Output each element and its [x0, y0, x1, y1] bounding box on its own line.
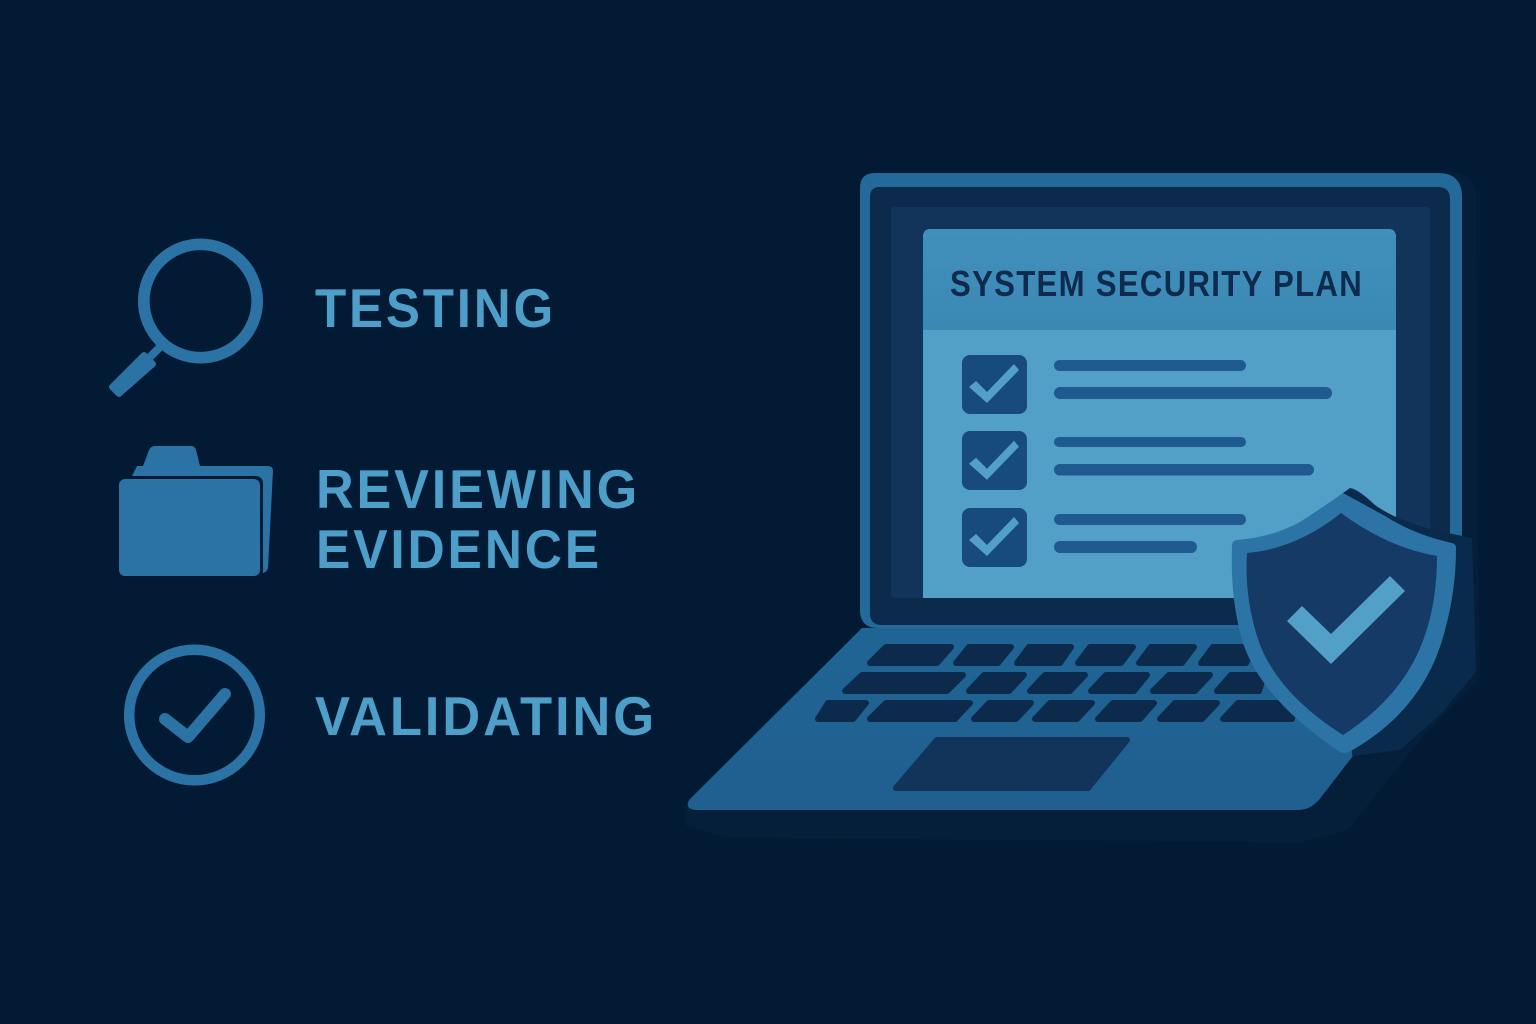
shield face: [1247, 513, 1437, 735]
laptop drop shadow: [684, 170, 1480, 842]
laptop lid: [860, 173, 1462, 628]
checklist item 2: [962, 431, 1314, 490]
document title: SYSTEM SECURITY PLAN: [950, 263, 1363, 304]
trackpad: [896, 740, 1127, 788]
laptop base: [688, 628, 1360, 810]
shield rim: [1232, 493, 1456, 753]
icon: folder: [119, 446, 273, 576]
list: activities: [112, 244, 657, 780]
document header: [923, 229, 1396, 330]
illustration: laptop with security plan: [684, 170, 1480, 842]
shield check mark: [1287, 576, 1405, 664]
checklist item 3: [962, 508, 1246, 567]
label: testing: TESTING: [315, 277, 556, 339]
label: reviewing evidence: EVIDENCE: [316, 518, 602, 580]
label: validating: VALIDATING: [315, 685, 657, 747]
icon: magnifying glass: [112, 244, 257, 394]
checklist item 1: [962, 355, 1332, 414]
label: reviewing evidence: [316, 458, 640, 580]
keyboard: [818, 647, 1294, 719]
shield cast shadow: [1343, 488, 1476, 756]
label: reviewing evidence: REVIEWING: [316, 458, 640, 520]
icon: check circle: [129, 650, 260, 780]
screen: [891, 207, 1430, 598]
document: system security plan: [923, 229, 1396, 598]
shield with check: [1232, 488, 1476, 756]
